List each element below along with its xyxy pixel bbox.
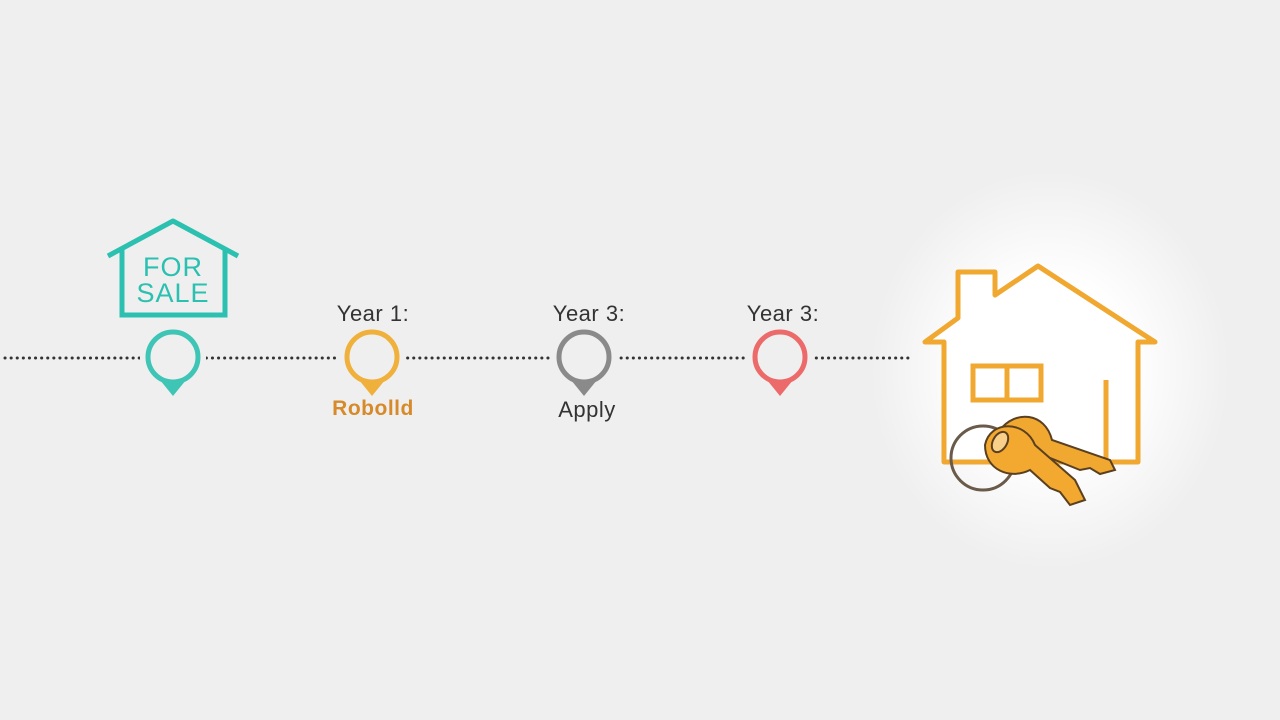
keys [951,426,1015,490]
label: Year 3: Year 3: [553,301,625,326]
glow behind house [870,170,1230,570]
label: Year 1: Year 1: [337,301,409,326]
label: Robolld: Robolld [332,397,414,420]
dotted line [5,356,912,360]
pin: teal [140,330,206,396]
label: Year 3 second: Year 3: [747,301,819,326]
icon: house with keys [925,266,1155,505]
pin: gray [551,330,617,396]
icon: for sale house [108,221,238,315]
pin: red [747,330,813,396]
icon: for sale house: SALE [136,278,210,308]
label: Apply: Apply [558,397,616,422]
icon: for sale house: FOR [143,252,203,282]
pin: orange [339,330,405,396]
